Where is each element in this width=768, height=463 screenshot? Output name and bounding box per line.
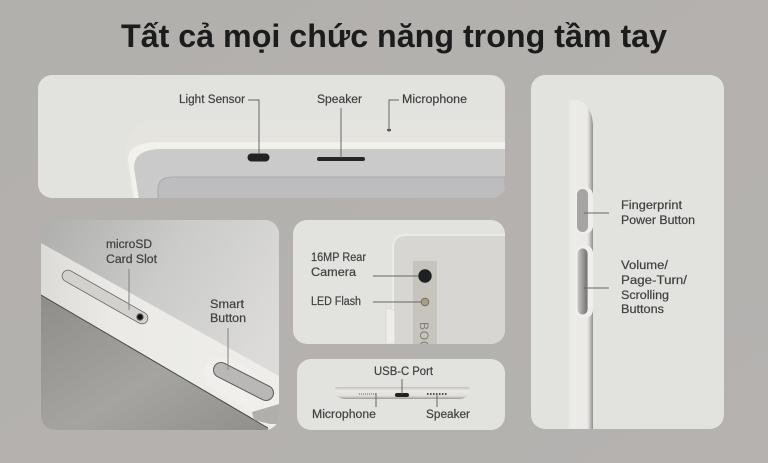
label: fingerprint power button: [584, 200, 695, 227]
label: microSD card slot: Card Slot: [106, 254, 158, 266]
icon: microSD slot: [68, 276, 142, 318]
device back: [393, 235, 512, 350]
label: smart button: [210, 299, 246, 370]
textured back: [41, 295, 268, 431]
label: speaker: [426, 394, 470, 421]
label: fingerprint power button: Fingerprint: [621, 200, 683, 212]
label: USB-C port: USB-C Port: [374, 366, 434, 378]
label: volume buttons: Scrolling: [621, 290, 669, 302]
panel: microSD and smart button: [41, 220, 279, 431]
brand text: BOOX: [417, 322, 431, 360]
display: [158, 177, 505, 199]
device frame: [125, 119, 505, 199]
label: smart button: Button: [210, 313, 246, 325]
camera strip: [413, 261, 437, 345]
power button housing: [588, 188, 593, 234]
label: light sensor: [179, 94, 259, 154]
icon: speaker slot: [317, 157, 365, 161]
label: microphone: Microphone: [402, 94, 467, 106]
icon: USB-C port: [395, 393, 409, 397]
icon: LED flash: [421, 298, 429, 306]
device side: [570, 100, 593, 429]
side button: [386, 308, 395, 344]
label: speaker: Speaker: [426, 409, 470, 421]
label: smart button: Smart: [210, 299, 245, 311]
label: volume buttons: [584, 260, 688, 316]
label: volume buttons: Page-Turn/: [621, 275, 688, 287]
volume button housing: [588, 246, 593, 318]
label: light sensor: Light Sensor: [179, 94, 245, 106]
icon: fingerprint power button: [577, 189, 588, 232]
label: USB-C port: [374, 366, 434, 394]
icon: camera lens: [418, 269, 432, 283]
label: microphone: Microphone: [312, 409, 376, 421]
bezel: [134, 149, 505, 199]
icon: microphone hole: [387, 128, 391, 132]
label: microphone: [312, 393, 376, 421]
panel: top edge sensors: [38, 75, 505, 199]
label: microSD card slot: [106, 239, 158, 310]
label: volume buttons: Volume/: [621, 260, 669, 272]
device bottom edge: [335, 387, 470, 399]
label: volume buttons: Buttons: [621, 304, 664, 316]
label: rear camera: 16MP Rear: [311, 252, 366, 264]
label: speaker: [317, 94, 362, 158]
label: rear camera: [311, 252, 418, 279]
panel: rear camera: [293, 220, 505, 344]
label: rear camera: Camera: [311, 267, 357, 279]
icon: light sensor: [248, 154, 270, 162]
icon: volume button: [577, 248, 588, 315]
icon: speaker grille: [427, 393, 447, 395]
panel: side buttons: [531, 75, 724, 430]
label: LED flash: [311, 296, 421, 308]
icon: microphone grille: [359, 393, 376, 395]
panel: bottom edge ports: [297, 359, 505, 430]
icon: smart button: [221, 370, 266, 393]
icon: SD pin hole: [137, 314, 143, 320]
label: LED flash: LED Flash: [311, 296, 361, 308]
label: speaker: Speaker: [317, 94, 362, 106]
device edge: [41, 243, 279, 430]
label: fingerprint power button: Power Button: [621, 215, 695, 227]
label: microphone: [389, 94, 467, 128]
label: microSD card slot: microSD: [106, 239, 152, 251]
smart button housing: [203, 357, 279, 412]
title: Tất cả mọi chức năng trong tầm tay: [121, 18, 667, 54]
